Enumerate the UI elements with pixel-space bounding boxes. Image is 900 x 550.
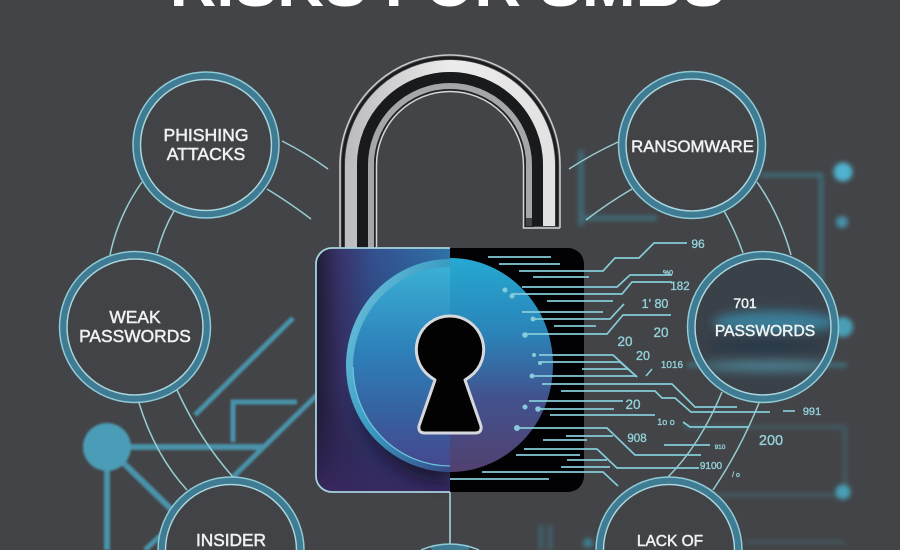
data stream numbers: 200: [759, 433, 783, 449]
background circuit: right side: [581, 150, 853, 542]
data stream numbers: 1016: [661, 360, 684, 371]
data stream numbers: %0: [663, 270, 673, 277]
lock stem connector: [449, 492, 451, 545]
node: phishing attacks: PHISHING: [163, 125, 249, 145]
connector arcs: right side: [569, 142, 791, 490]
background bars below lock: [541, 525, 593, 550]
data stream numbers: 96: [691, 237, 705, 251]
data stream numbers: 182: [670, 281, 690, 293]
node: weak passwords: PASSWORDS: [79, 326, 191, 346]
node: weak passwords: WEAK: [109, 307, 161, 327]
data stream numbers: 1' 80: [642, 297, 668, 311]
node: phishing attacks: ATTACKS: [167, 144, 245, 164]
data stream numbers: 20: [636, 349, 650, 363]
data stream numbers: 908: [627, 433, 647, 445]
data stream numbers: 20: [617, 334, 633, 349]
padlock shackle: [340, 55, 560, 248]
data stream numbers: / o: [732, 472, 740, 479]
node: ransomware: [618, 72, 766, 218]
node: bottom centre: [421, 544, 479, 550]
padlock body: [316, 248, 584, 492]
node: lack of: LACK OF: [637, 533, 703, 550]
padlock disc: [346, 258, 553, 472]
node: passwords: PASSWORDS: [715, 323, 815, 340]
node: passwords: [688, 252, 840, 402]
node: phishing attacks: [133, 72, 279, 218]
node: lack of: [596, 477, 742, 550]
node: insider threats: INSIDER: [196, 530, 266, 550]
keyhole: [416, 316, 484, 433]
data stream numbers: 9100: [700, 461, 723, 472]
node: ransomware: RANSOMWARE: [631, 137, 754, 156]
background circuit: lower left: [83, 318, 318, 550]
data stream numbers: 991: [803, 406, 821, 418]
data stream numbers: [617, 237, 821, 479]
data stream lines: [450, 243, 795, 486]
connector arcs: left side: [110, 141, 328, 490]
node: weak passwords: [60, 252, 210, 402]
data stream numbers: 910: [715, 444, 726, 451]
node: insider threats: [158, 477, 304, 550]
data stream numbers: 1o o: [657, 417, 675, 427]
node: passwords: 701: [733, 295, 757, 311]
data stream numbers: 20: [625, 397, 641, 412]
data stream numbers: 20: [653, 325, 669, 340]
